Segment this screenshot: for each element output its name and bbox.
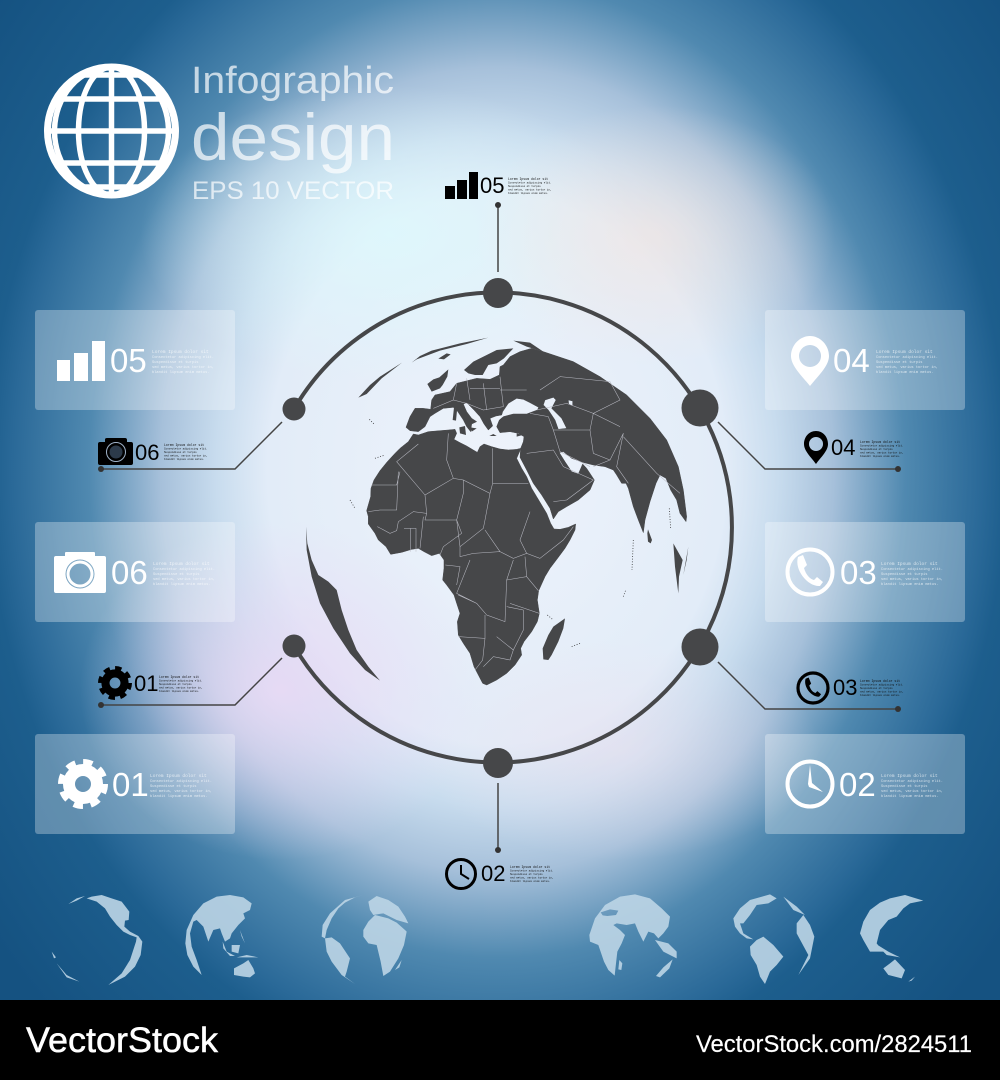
label: dark 04 pin: blandit lipsum enim metus. xyxy=(860,454,900,458)
label: dark 02 clock: 02 xyxy=(481,861,505,886)
connector: lower left xyxy=(98,658,282,708)
icon: bars xyxy=(57,341,105,381)
lorem text: sed metus, varius tortor in, xyxy=(152,365,214,370)
lorem text: Consectetur adipiscing elit. xyxy=(881,779,943,784)
number 04: 04 xyxy=(833,342,870,379)
globe: Americas at edge xyxy=(52,895,142,985)
panel: 05 left xyxy=(35,310,235,410)
lorem text: Consectetur adipiscing elit. xyxy=(153,567,215,572)
Madagascar and Sri Lanka xyxy=(543,529,652,660)
lorem text: Suspendisse et turpis xyxy=(881,572,927,577)
label: dark 05 top: sed metus, varius tortor in, xyxy=(508,188,552,192)
Scandinavia, Britain and northern islands xyxy=(358,338,543,437)
label: dark 06 camera: 06 xyxy=(135,440,159,465)
lorem text: Lorem Ipsum dolor sit xyxy=(881,561,938,567)
Indonesia sliver xyxy=(673,543,688,593)
lorem text: Suspendisse et turpis xyxy=(152,360,198,365)
central world map globe xyxy=(306,338,688,685)
label: dark 06 camera: Lorem Ipsum dolor sit xyxy=(164,443,204,447)
footer url: VectorStock.com/2824511 xyxy=(696,1031,972,1058)
lorem text: blandit lipsum enim metus. xyxy=(152,370,210,375)
number 03: 03 xyxy=(840,554,877,591)
label: dark 05 top: blandit lipsum enim metus. xyxy=(508,191,548,195)
label: dark 01 gear xyxy=(101,669,203,697)
small globes: right group xyxy=(589,894,923,984)
panel: 02 right xyxy=(765,734,965,834)
lorem text: Lorem Ipsum dolor sit xyxy=(153,561,210,567)
icon: map pin xyxy=(791,336,829,386)
icon: gear xyxy=(62,763,104,805)
node: top xyxy=(483,278,513,308)
label: dark 02 clock: Suspendisse et turpis xyxy=(510,872,543,876)
lorem text: Consectetur adipiscing elit. xyxy=(152,355,214,360)
icon: wireframe globe xyxy=(47,67,176,195)
label: dark 05 top: Suspendisse et turpis xyxy=(508,184,541,188)
label: dark 03 phone: sed metus, varius tortor in, xyxy=(860,690,904,694)
lorem text: Lorem Ipsum dolor sit xyxy=(150,773,207,779)
label: dark 04 pin: Lorem Ipsum dolor sit xyxy=(860,440,900,444)
label: dark 04 pin xyxy=(804,431,904,464)
footer brand: VectorStock xyxy=(26,1021,219,1060)
label: dark 05 top xyxy=(445,172,552,199)
heading: design: design xyxy=(191,100,395,174)
icon: clock xyxy=(788,762,832,806)
node: upper left xyxy=(282,398,306,420)
label: dark 06 camera: sed metus, varius tortor in, xyxy=(164,454,208,458)
lorem text: blandit lipsum enim metus. xyxy=(153,582,211,587)
lorem text: Suspendisse et turpis xyxy=(150,784,196,789)
label: dark 06 camera: Consectetur adipiscing elit. xyxy=(164,446,208,450)
connector: lower right xyxy=(718,662,901,712)
landmass: Eurasia and Arabia xyxy=(406,348,687,533)
label: dark 03 phone: 03 xyxy=(833,675,857,700)
label: dark 01 gear: 01 xyxy=(134,671,158,696)
panel: 03 right xyxy=(765,522,965,622)
label: dark 02 clock: Consectetur adipiscing elit. xyxy=(510,868,554,872)
label: dark 05 top: Consectetur adipiscing elit. xyxy=(508,180,552,184)
number 06: 06 xyxy=(111,554,148,591)
label: dark 04 pin: 04 xyxy=(831,435,855,460)
lorem text: sed metus, varius tortor in, xyxy=(881,789,943,794)
label: dark 02 clock: blandit lipsum enim metus. xyxy=(510,879,550,883)
South America sliver xyxy=(306,527,380,681)
number 05: 05 xyxy=(110,342,147,379)
lorem text: blandit lipsum enim metus. xyxy=(150,794,208,799)
globe: Asia and Australia xyxy=(185,895,258,977)
lorem text: Suspendisse et turpis xyxy=(881,784,927,789)
label: dark 01 gear: sed metus, varius tortor in, xyxy=(159,686,203,690)
label: dark 02 clock xyxy=(446,860,554,888)
footer bar xyxy=(0,1000,1000,1080)
lorem text: Suspendisse et turpis xyxy=(876,360,922,365)
label: dark 04 pin: sed metus, varius tortor in, xyxy=(860,450,904,454)
label: dark 04 pin: Suspendisse et turpis xyxy=(860,447,893,451)
landmass: Africa xyxy=(367,429,576,685)
lorem text: Lorem Ipsum dolor sit xyxy=(876,349,933,355)
node: lower right xyxy=(682,628,718,666)
connector: top xyxy=(495,202,501,272)
lorem text: Consectetur adipiscing elit. xyxy=(876,355,938,360)
tiny islands xyxy=(350,419,671,647)
panel: 04 right xyxy=(765,310,965,410)
lorem text: sed metus, varius tortor in, xyxy=(876,365,938,370)
label: dark 03 phone: Consectetur adipiscing elit. xyxy=(860,682,904,686)
ring around globe xyxy=(294,292,732,762)
label: dark 01 gear: Consectetur adipiscing elit. xyxy=(159,678,203,682)
lorem text: Lorem Ipsum dolor sit xyxy=(881,773,938,779)
label: dark 05 top: 05 xyxy=(480,173,504,198)
lorem text: Lorem Ipsum dolor sit xyxy=(152,349,209,355)
number 02: 02 xyxy=(839,766,876,803)
icon: phone xyxy=(788,550,832,594)
label: dark 02 clock: sed metus, varius tortor in, xyxy=(510,876,554,880)
label: dark 03 phone: Suspendisse et turpis xyxy=(860,686,893,690)
label: dark 04 pin: Consectetur adipiscing elit. xyxy=(860,444,904,448)
label: dark 01 gear: Lorem Ipsum dolor sit xyxy=(159,675,199,679)
lorem text: blandit lipsum enim metus. xyxy=(881,794,939,799)
lorem text: blandit lipsum enim metus. xyxy=(881,582,939,587)
label: dark 02 clock: Lorem Ipsum dolor sit xyxy=(510,865,550,869)
heading: EPS 10 VECTOR: EPS 10 VECTOR xyxy=(192,177,394,205)
connector: upper right xyxy=(718,422,901,472)
node: bottom xyxy=(483,748,513,778)
title block xyxy=(47,60,395,205)
connector: bottom xyxy=(495,783,501,853)
lorem text: Consectetur adipiscing elit. xyxy=(150,779,212,784)
connector: upper left xyxy=(98,422,282,472)
node: upper right xyxy=(682,390,718,426)
globe: Atlantic with Africa and South America xyxy=(322,895,408,984)
lorem text: Consectetur adipiscing elit. xyxy=(881,567,943,572)
globe: Americas and Africa xyxy=(733,894,814,984)
label: dark 01 gear: Suspendisse et turpis xyxy=(159,682,192,686)
panel: 01 left xyxy=(35,734,235,834)
lorem text: sed metus, varius tortor in, xyxy=(153,577,215,582)
label: dark 06 camera: blandit lipsum enim metus. xyxy=(164,457,204,461)
label: dark 03 phone: Lorem Ipsum dolor sit xyxy=(860,679,900,683)
label: dark 01 gear: blandit lipsum enim metus. xyxy=(159,689,199,693)
heading: Infographic: Infographic xyxy=(191,60,394,102)
country borders xyxy=(368,377,680,670)
lorem text: Suspendisse et turpis xyxy=(153,572,199,577)
label: dark 03 phone xyxy=(798,673,904,703)
lorem text: blandit lipsum enim metus. xyxy=(876,370,934,375)
globe: Asia Pacific and Australia xyxy=(860,895,923,982)
panel: 06 left xyxy=(35,522,235,622)
lorem text: sed metus, varius tortor in, xyxy=(881,577,943,582)
lorem text: sed metus, varius tortor in, xyxy=(150,789,212,794)
node: lower left xyxy=(282,634,306,658)
label: dark 06 camera xyxy=(98,438,208,465)
icon: camera xyxy=(54,552,106,593)
label: dark 05 top: Lorem Ipsum dolor sit xyxy=(508,177,548,181)
label: dark 03 phone: blandit lipsum enim metus. xyxy=(860,693,900,697)
label: dark 06 camera: Suspendisse et turpis xyxy=(164,450,197,454)
number 01: 01 xyxy=(112,766,149,803)
globe: Africa and Asia xyxy=(589,894,677,977)
small globes: left group xyxy=(52,895,408,985)
